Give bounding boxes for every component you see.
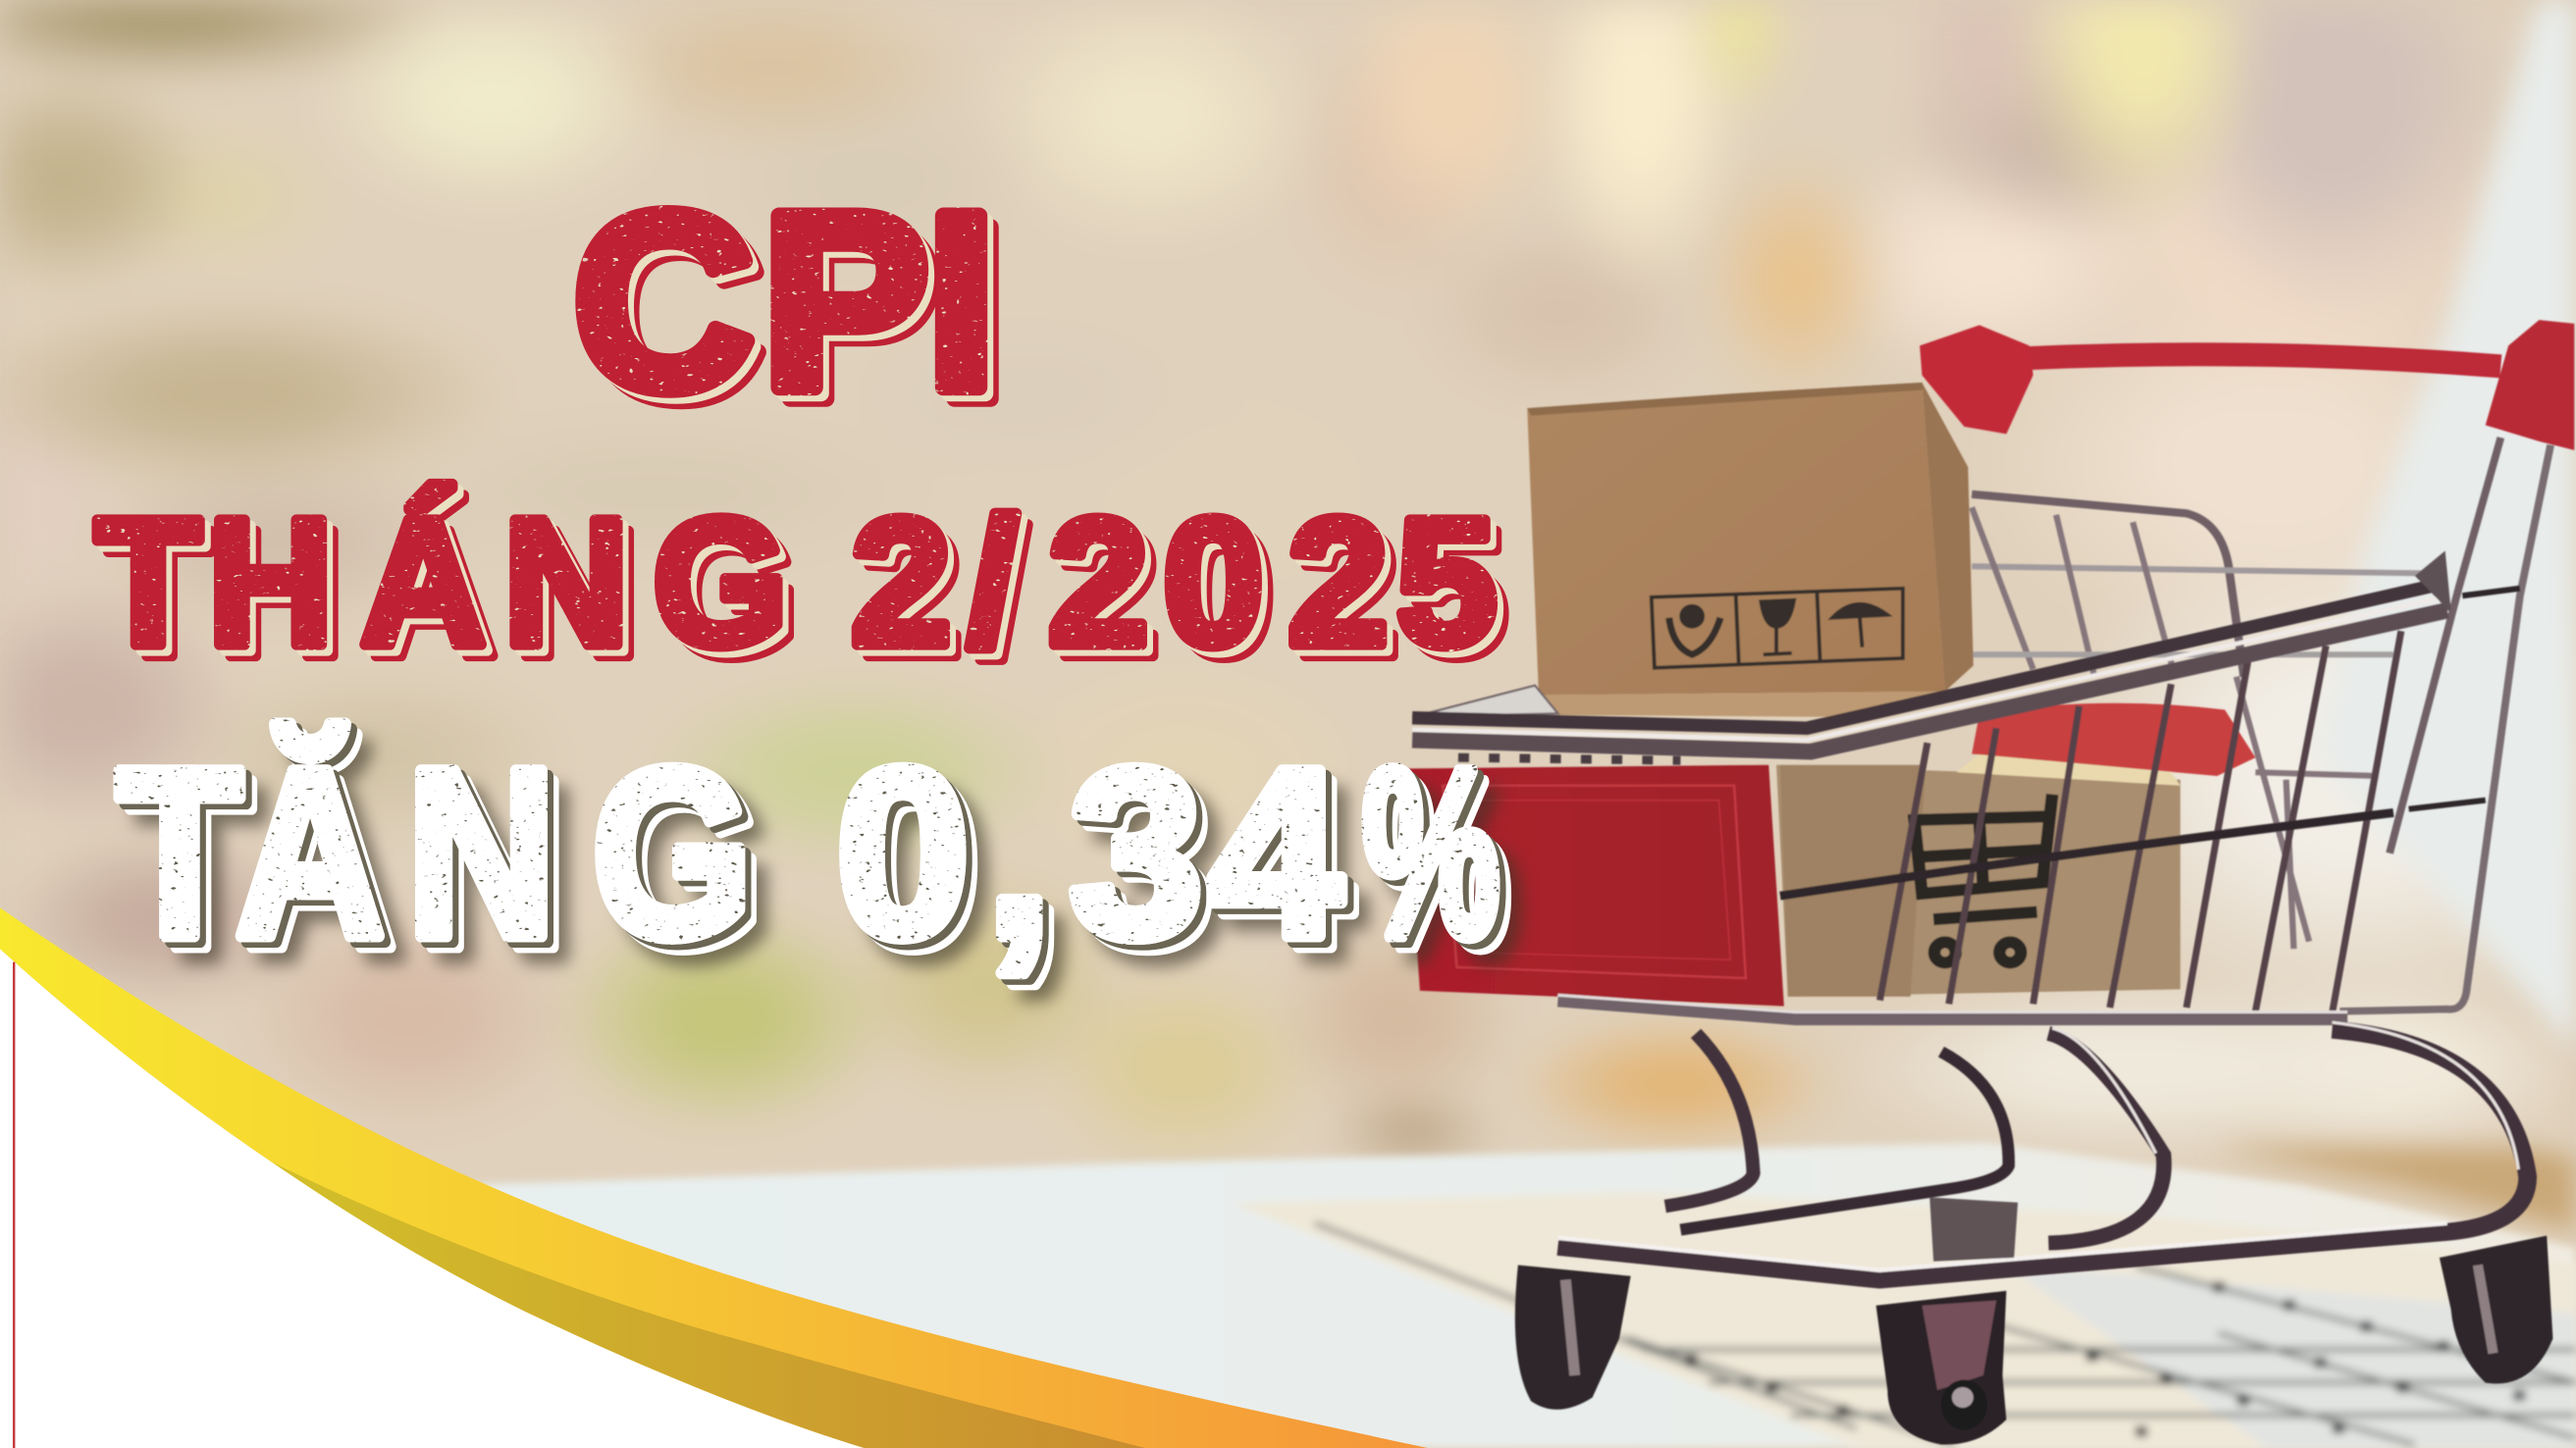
red basket flap <box>1404 703 2255 1007</box>
handling icons <box>1652 589 1903 668</box>
swoosh: yellow-orange band <box>0 907 1428 1448</box>
shopping cart with boxes <box>1404 320 2574 1445</box>
left wheel <box>1515 1266 1631 1410</box>
swoosh: olive-gold shade <box>273 1163 1145 1448</box>
headline: TĂNG 0,34% <box>117 719 1499 987</box>
back wheel <box>1929 1198 2018 1262</box>
swoosh: white corner <box>0 949 865 1448</box>
back wire basket <box>1971 494 2447 949</box>
red margin line <box>13 962 15 1448</box>
cart logo on box <box>1915 795 2052 962</box>
cart legs and base <box>1558 1022 2528 1280</box>
right wheel <box>2440 1236 2552 1383</box>
title: THÁNG 2/2025 <box>95 482 1497 684</box>
laptop lid <box>2316 0 2576 1051</box>
basket front wires <box>1558 438 2550 1018</box>
red handle <box>1919 320 2574 450</box>
title: THÁNG 2/2025: 2/2025 <box>851 482 1497 684</box>
title: THÁNG 2/2025: THÁNG <box>95 483 788 684</box>
lower box <box>1776 753 2181 997</box>
keyboard <box>1233 1192 2576 1448</box>
headline: TĂNG 0,34%: % <box>1362 719 1499 987</box>
headline: TĂNG 0,34%: 0,34 <box>836 719 1342 987</box>
title: CPI: CPI <box>573 162 996 440</box>
centre wheel <box>1876 1291 2006 1445</box>
top box <box>1527 383 1973 717</box>
desk patch <box>2211 1148 2576 1231</box>
laptop body <box>460 1143 2576 1448</box>
front rim and tray <box>1412 555 2448 760</box>
headline: TĂNG 0,34%: TĂNG <box>117 720 753 987</box>
